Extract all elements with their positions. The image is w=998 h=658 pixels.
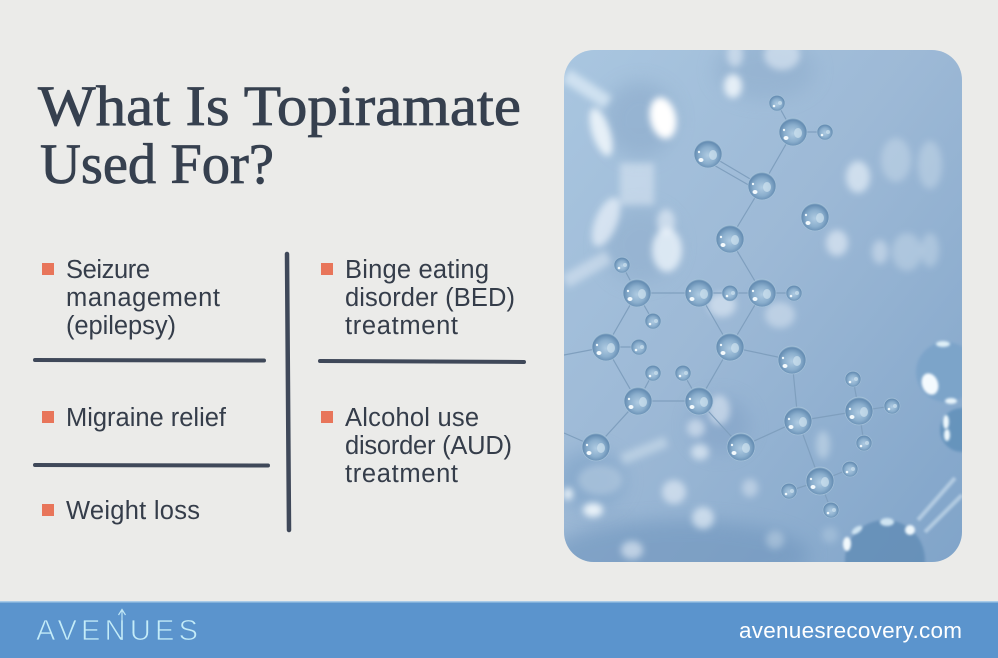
bullet: seizure management: management <box>66 284 220 312</box>
bullet: binge eating disorder <box>321 256 515 340</box>
title: What Is Topiramate <box>38 75 521 138</box>
molecule bonds <box>564 103 892 510</box>
bullet: alcohol use disorder: Alcohol use <box>345 404 479 432</box>
bullet: weight loss: Weight loss <box>66 497 200 525</box>
logo: Avenues: AVENUES <box>36 615 198 647</box>
footer bar <box>0 601 998 658</box>
list: right column conditions <box>321 256 515 488</box>
bullet: binge eating disorder: Binge eating <box>345 256 489 284</box>
molecule atoms <box>582 95 900 518</box>
bullet: binge eating disorder: disorder (BED) <box>345 284 515 312</box>
website url: avenuesrecovery.com <box>739 618 962 643</box>
bullet: seizure management: (epilepsy) <box>66 312 176 340</box>
bullet: alcohol use disorder: treatment <box>345 460 458 488</box>
bullet: seizure management <box>42 256 220 340</box>
title <box>38 75 521 196</box>
list: left column conditions <box>42 256 227 525</box>
image panel: blue molecule <box>564 50 962 562</box>
bullet: binge eating disorder: treatment <box>345 312 458 340</box>
bullet: alcohol use disorder: disorder (AUD) <box>345 432 512 460</box>
blurred bokeh highlights <box>562 40 942 559</box>
large glass spheres lower right <box>842 340 962 562</box>
bullet: alcohol use disorder <box>321 404 512 488</box>
title: Used For? <box>40 133 274 196</box>
bullet: migraine relief: Migraine relief <box>66 404 227 432</box>
bullet: seizure management: Seizure <box>66 256 150 284</box>
